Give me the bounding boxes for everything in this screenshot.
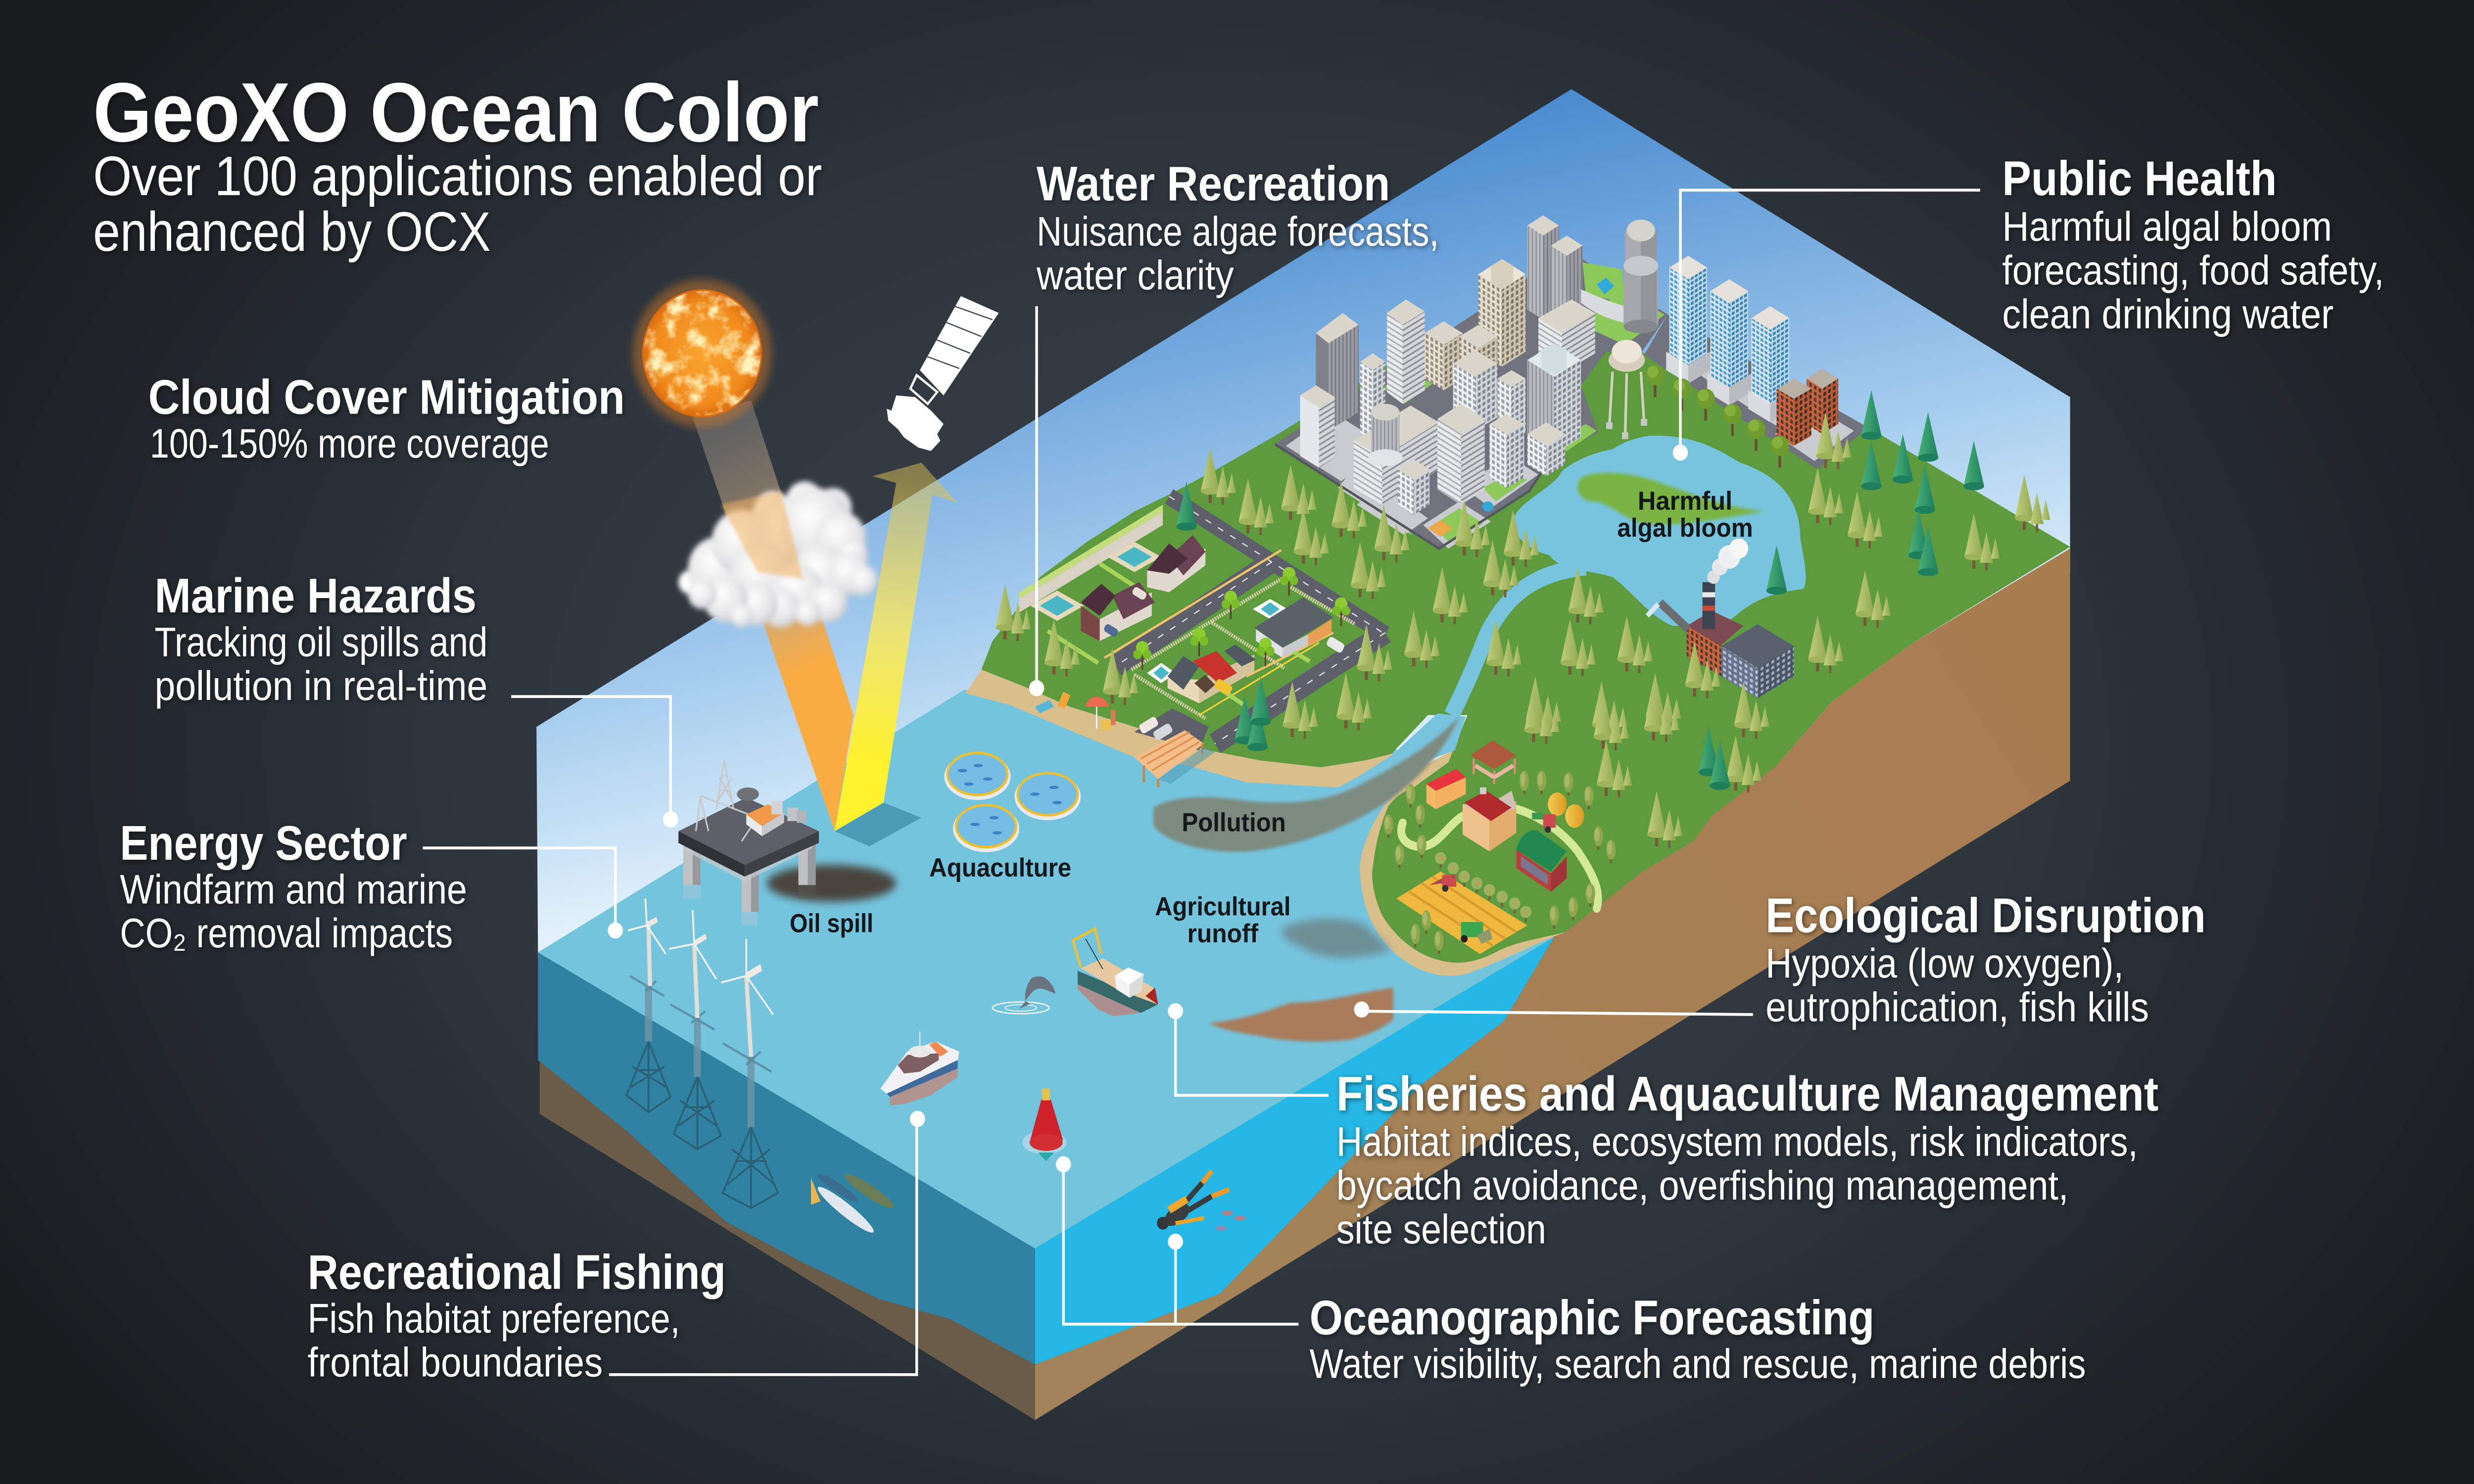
city ground blocks [1275,259,1868,549]
city towers [1300,215,1838,537]
callout: marine hazards: Marine Hazards [154,568,476,623]
callout: oceanographic forecasting [1310,1291,2086,1387]
water tower [1606,340,1647,439]
green roof barn [1516,831,1567,892]
isometric ocean block diagram [536,89,2070,1420]
callout: fisheries and aquaculture management: Fisheries and Aquaculture Management [1336,1067,2158,1121]
callout: energy sector [120,816,467,957]
oil spill [767,865,896,902]
back fence [1019,505,1163,612]
river [1326,567,1586,808]
block side: ocean front left [538,952,1035,1365]
callout: marine hazards: Tracking oil spills and [154,619,487,665]
diagram labels [790,486,1753,948]
callout: public health: Public Health [2002,151,2277,206]
callout: water recreation: Nuisance algae forecasts, [1037,209,1439,255]
farm gazebo [1471,741,1516,784]
lake [1513,436,1806,626]
label: pollution: Pollution [1182,808,1286,837]
ocean surface [538,690,1554,1249]
label: agricultural runoff [1155,892,1290,948]
callout: recreational fishing: frontal boundaries [308,1340,603,1386]
cloud [678,481,877,628]
beach goers and dock [1035,692,1215,788]
scuba diver and small fish [1157,1171,1246,1231]
callout: ecological disruption [1765,888,2206,1030]
title: GeoXO Ocean Color [93,65,819,159]
satellite [887,296,999,451]
house: red roof [1168,645,1256,703]
roads [1115,496,1385,750]
aquaculture pens [944,753,1081,852]
callout: fisheries and aquaculture management: Habitat indices, ecosystem models, risk indicators, [1336,1119,2138,1165]
farm [1384,741,1616,954]
house: grey roof [1254,597,1333,658]
fish school [811,1170,897,1237]
wind turbines [626,898,778,1208]
callout: recreational fishing: Recreational Fishing [308,1245,726,1299]
farm shed [1427,769,1466,809]
callout: ecological disruption: Hypoxia (low oxygen), [1765,941,2124,987]
callout: fisheries and aquaculture management [1336,1067,2158,1252]
pen 2 [1014,773,1081,820]
callout: oceanographic forecasting: Water visibility, search and rescue, marine debris [1310,1341,2086,1387]
callout: public health: forecasting, food safety, [2002,248,2384,293]
red buoy [1022,1089,1067,1161]
callout: energy sector: Energy Sector [120,816,407,871]
callout: marine hazards: pollution in real-time [154,663,487,709]
dolphin [993,976,1055,1014]
callout: marine hazards [154,568,487,709]
callout: cloud cover mitigation: Cloud Cover Mitigation [148,370,625,424]
back wall: sky [536,89,2070,1249]
callout: water recreation [1036,156,1439,299]
label: agricultural runoff: runoff [1188,919,1259,948]
beam: sunlight to ocean [693,401,854,831]
callout: energy sector: Windfarm and marine [120,867,467,913]
callout: ecological disruption: eutrophication, fish kills [1765,984,2149,1030]
subtitle: Over 100 applications enabled or [93,145,822,207]
pools [1030,542,1287,683]
label: agricultural runoff: Agricultural [1155,892,1290,921]
picket fences and hedges [1047,550,1355,718]
leader lines and dots [423,190,1980,1375]
callout: cloud cover mitigation [148,370,625,467]
speedboat [880,1031,959,1106]
cars [1103,586,1345,742]
block side: soil front right [1035,549,2070,1420]
land: green terrain [981,336,2070,963]
label: oil spill: Oil spill [790,909,873,938]
callout: public health: clean drinking water [2002,291,2333,337]
crop field [1396,872,1527,954]
fishing boat [1073,929,1158,1016]
coastline sand: north beach [966,670,1395,788]
tractors and combine [1429,813,1556,944]
callout: recreational fishing [308,1245,726,1386]
coastline sand: farm peninsula [1360,741,1594,976]
reflected beam shadow on water [835,802,921,846]
sun [633,279,771,427]
arrow: reflected light to satellite [835,463,958,831]
subtitle: enhanced by OCX [93,201,491,263]
callout: public health: Harmful algal bloom [2002,204,2332,250]
pen 1 [944,753,1010,800]
callout: fisheries and aquaculture management: bycatch avoidance, overfishing management, [1336,1163,2068,1209]
callout: ecological disruption: Ecological Disruption [1765,888,2206,943]
callout: oceanographic forecasting: Oceanographic Forecasting [1310,1291,1874,1345]
hay silos [1548,792,1584,828]
round trees by the water tower [1646,365,1789,468]
label: harmful algal bloom [1617,486,1753,542]
callout: water recreation: Water Recreation [1037,156,1390,211]
label: harmful algal bloom: algal bloom [1617,513,1753,542]
callout: water recreation: water clarity [1036,253,1234,299]
callout: recreational fishing: Fish habitat preference, [308,1296,680,1342]
factory with smoke [1647,538,1794,698]
farm paths [1401,808,1598,909]
subtitle [93,145,822,263]
callout: public health [2002,151,2384,337]
block side: ocean front right [1035,937,1554,1365]
farmhouse [1463,788,1516,851]
agricultural runoff plume [1281,919,1391,958]
beam tint over cloud [721,491,803,579]
block side: soil front left [540,1060,1035,1420]
callout: energy sector: CO₂ removal impacts [120,911,453,957]
callout: cloud cover mitigation: 100-150% more coverage [150,421,549,467]
forest trees [996,390,2050,848]
oil platform [678,760,819,926]
hypoxia brown plume [1209,988,1393,1042]
label: aquaculture: Aquaculture [929,853,1071,882]
house: upper maroon roof [1147,535,1205,592]
pollution plume [1153,717,1460,852]
callout: fisheries and aquaculture management: site selection [1336,1206,1546,1252]
label: harmful algal bloom: Harmful [1638,486,1732,515]
house: brick with maroon roof [1081,582,1155,641]
pen 3 [953,805,1019,852]
harmful algal bloom patch [1578,473,1764,525]
suburb neighbourhood [1019,496,1385,750]
